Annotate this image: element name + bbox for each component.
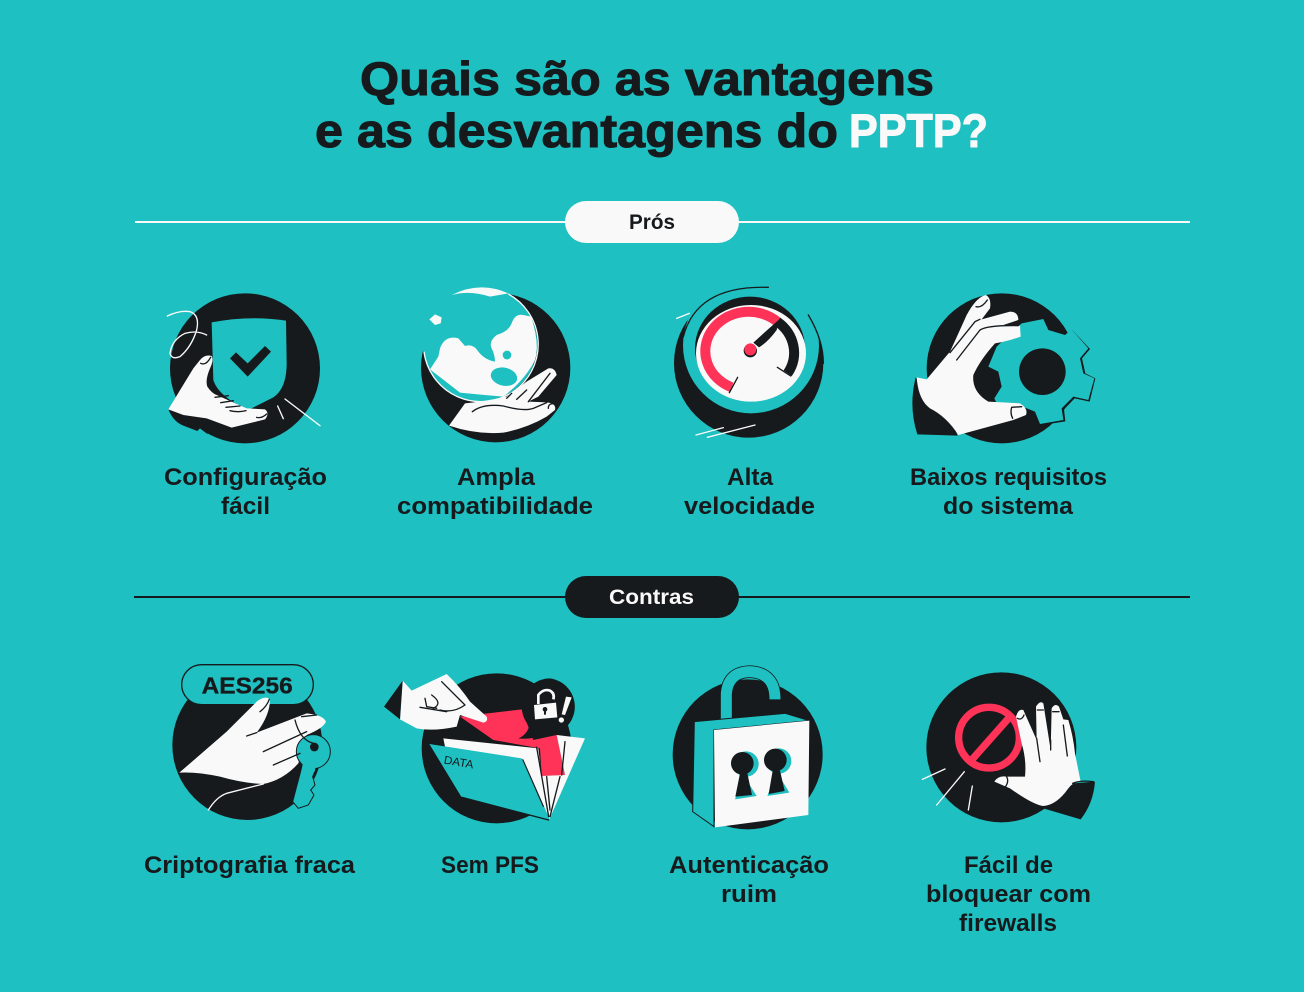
icon: hand holding gear xyxy=(912,293,1095,443)
label: Sem PFS: Sem PFS xyxy=(441,852,539,879)
DATA label: DATA xyxy=(443,754,475,772)
label: Baixos requisitos do sistema: Baixos requisitos xyxy=(910,464,1107,491)
label: Fácil de bloquear com firewalls: Fácil de xyxy=(964,852,1053,879)
label: Fácil de bloquear com firewalls: firewalls xyxy=(959,910,1057,937)
icon: hand with prohibition sign xyxy=(922,672,1095,822)
icon: padlock with two keyholes xyxy=(673,672,823,829)
icon: hand holding shield xyxy=(167,293,320,443)
label: Alta velocidade xyxy=(684,464,815,520)
label: Baixos requisitos do sistema: do sistema xyxy=(943,493,1073,520)
label: Configuração fácil: fácil xyxy=(221,493,270,520)
label: Fácil de bloquear com firewalls xyxy=(926,852,1091,937)
label: Ampla compatibilidade: compatibilidade xyxy=(397,493,593,520)
title: Quais são as vantagens xyxy=(360,52,934,105)
AES256 pill xyxy=(182,665,313,705)
label: Configuração fácil xyxy=(164,464,327,520)
label: Alta velocidade: Alta xyxy=(727,464,773,491)
label: Criptografia fraca: Criptografia fraca xyxy=(144,852,355,879)
icon: hand holding globe xyxy=(421,287,570,442)
label: Autenticação ruim: Autenticação xyxy=(669,852,829,879)
section header: Prós xyxy=(565,201,739,243)
icon: hand taking data from folder xyxy=(384,673,585,823)
label: Configuração fácil: Configuração xyxy=(164,464,327,491)
title: e as desvantagens do xyxy=(315,104,838,157)
section header: Prós: Prós xyxy=(629,211,675,234)
section header: Contras: Contras xyxy=(609,586,694,609)
label: Ampla compatibilidade: Ampla xyxy=(457,464,535,491)
label: Autenticação ruim xyxy=(669,852,829,908)
label: Alta velocidade: velocidade xyxy=(684,493,815,520)
title: PPTP? xyxy=(849,104,988,157)
label: Baixos requisitos do sistema xyxy=(910,464,1107,520)
title xyxy=(315,52,988,157)
label: Fácil de bloquear com firewalls: bloquear com xyxy=(926,881,1091,908)
AES256 pill: AES256 xyxy=(202,672,293,698)
icon: hand holding key, AES256 xyxy=(172,665,330,820)
section header: Contras xyxy=(565,576,739,618)
icon: speedometer xyxy=(674,277,823,438)
label: Autenticação ruim: ruim xyxy=(721,881,777,908)
label: Ampla compatibilidade xyxy=(397,464,593,520)
